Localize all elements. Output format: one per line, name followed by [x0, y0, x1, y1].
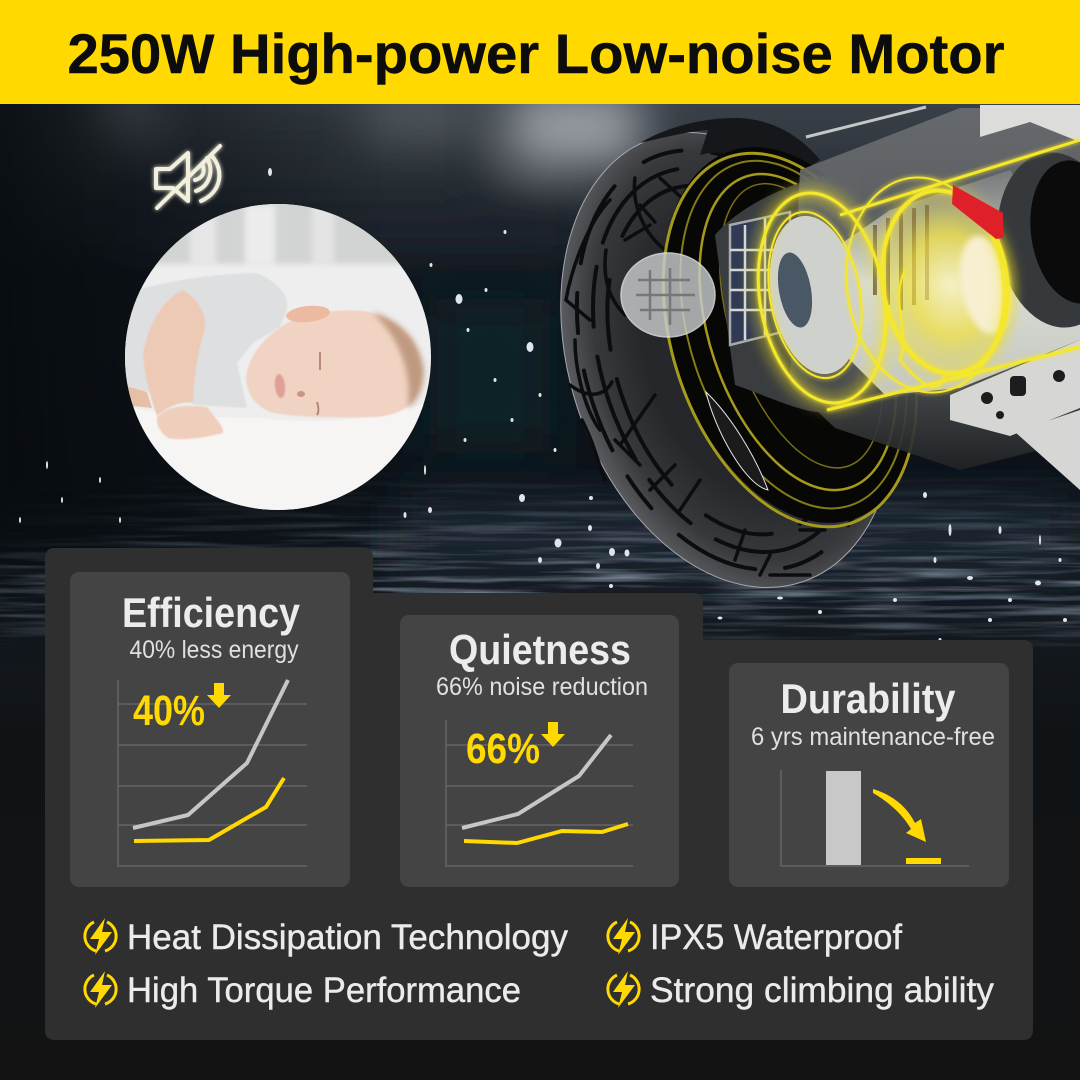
black motor end cap	[986, 145, 1080, 335]
bright yellow energy rings	[743, 140, 1080, 413]
heading: Efficiency	[122, 589, 301, 636]
heading: Durability	[780, 675, 956, 722]
subheading: 66% noise reduction	[436, 673, 648, 701]
heading: Quietness	[449, 626, 631, 673]
rim outer yellow rings	[618, 120, 962, 560]
tyre tread	[525, 110, 931, 610]
feature: waterproof: IPX5 Waterproof	[650, 918, 902, 957]
arm	[143, 290, 205, 416]
soft yellow halo	[743, 182, 1019, 413]
clear lens cap	[621, 253, 715, 337]
cream stator opening	[953, 232, 1017, 338]
tyre	[504, 88, 952, 632]
photo: sleeping baby in circle	[120, 200, 440, 520]
gears	[730, 212, 790, 345]
rain droplets	[19, 168, 1067, 642]
illustration: tyre with cutaway motor	[504, 88, 1080, 632]
feature: high torque: High Torque Performance	[127, 971, 521, 1010]
hand	[157, 406, 223, 439]
feature: heat dissipation: Heat Dissipation Technology	[127, 918, 568, 957]
nose and eyes	[297, 352, 320, 415]
ear	[286, 306, 330, 322]
subheading: 6 yrs maintenance-free	[751, 723, 995, 751]
panel: durability card	[729, 663, 1009, 887]
centre ring of shaft	[758, 209, 872, 381]
panel: quietness card	[400, 615, 679, 887]
red tab	[952, 185, 1003, 239]
line chart: noise	[446, 720, 633, 866]
title banner: 250W High-power Low-noise Motor	[68, 22, 1004, 85]
top rod	[806, 107, 926, 137]
shirt	[120, 273, 287, 408]
lower plate	[950, 340, 1080, 490]
head	[246, 310, 420, 417]
66% callout: 66%	[466, 725, 540, 773]
copper winding	[875, 205, 927, 310]
hair	[372, 312, 424, 408]
rim dark core	[617, 113, 967, 557]
white bracket top	[980, 105, 1080, 142]
hub detail	[715, 170, 860, 413]
lower arm skin	[128, 386, 152, 408]
panel: efficiency card	[70, 572, 350, 887]
title banner	[0, 0, 1080, 104]
motor housing	[790, 108, 1080, 470]
curtain backdrop	[155, 204, 401, 266]
background: rainy night street	[0, 104, 1080, 698]
subheading: 40% less energy	[130, 636, 299, 664]
pillow	[134, 404, 424, 510]
silver cylinder body	[825, 170, 1080, 395]
bar chart: maintenance	[781, 770, 969, 866]
curved arrow	[873, 789, 926, 842]
down arrow	[541, 722, 565, 747]
fender	[640, 118, 820, 182]
yellow glow core	[863, 182, 1037, 388]
40% callout: 40%	[133, 687, 205, 735]
down arrow	[207, 683, 231, 708]
feature: climbing: Strong climbing ability	[650, 971, 994, 1010]
plate holes	[981, 370, 1065, 419]
line chart: energy	[118, 680, 307, 866]
info panel: stepped dark backing	[45, 548, 1033, 1040]
icon: mute speaker	[156, 146, 220, 208]
lips	[274, 374, 286, 398]
